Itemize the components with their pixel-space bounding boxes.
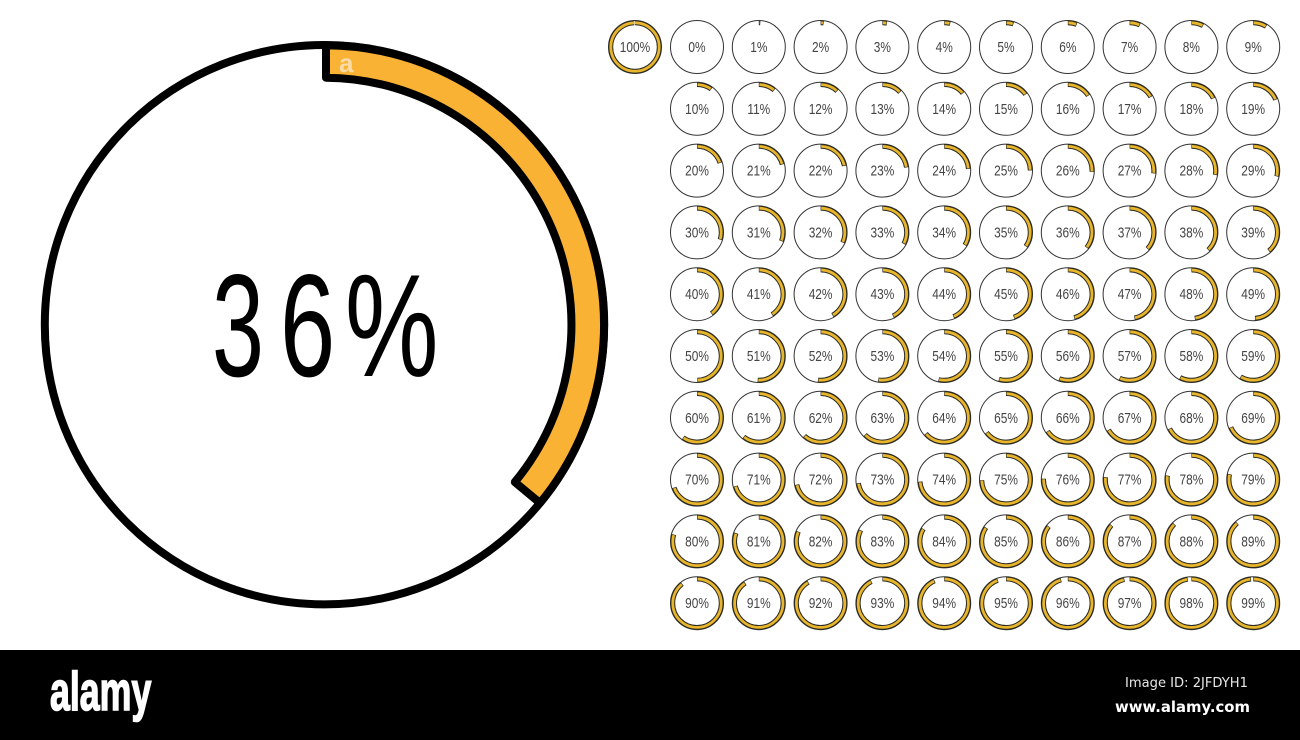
gauge 31%: 31% xyxy=(747,224,771,241)
gauge 4% xyxy=(918,20,971,74)
gauge 62% xyxy=(794,391,847,444)
gauge 61%: 61% xyxy=(747,410,771,426)
gauge 34%: 34% xyxy=(932,224,956,241)
gauge 96%: 96% xyxy=(1056,595,1080,611)
gauge 6%: 6% xyxy=(1059,39,1077,55)
gauge 52% xyxy=(794,330,847,382)
gauge 97% xyxy=(1103,577,1156,630)
gauge 71%: 71% xyxy=(747,471,771,488)
gauge 16% xyxy=(1041,82,1094,135)
gauge 25%: 25% xyxy=(994,162,1018,179)
gauge 56%: 56% xyxy=(1056,348,1080,364)
gauge 77%: 77% xyxy=(1118,471,1142,488)
gauge 74%: 74% xyxy=(932,471,956,488)
gauge 91%: 91% xyxy=(747,595,771,611)
gauge 37% xyxy=(1103,206,1156,259)
gauge 73%: 73% xyxy=(871,471,894,488)
gauge 35% xyxy=(980,206,1032,259)
gauge 97%: 97% xyxy=(1118,595,1142,611)
gauge 92% xyxy=(794,577,847,630)
gauge 8%: 8% xyxy=(1183,39,1200,55)
gauge 55% xyxy=(980,330,1032,382)
gauge 19% xyxy=(1227,82,1280,135)
gauge 93%: 93% xyxy=(871,595,894,611)
gauge 83%: 83% xyxy=(871,533,894,550)
gauge 38%: 38% xyxy=(1180,224,1203,241)
gauge 83% xyxy=(856,515,909,568)
gauge 90% xyxy=(670,577,724,630)
gauge 26%: 26% xyxy=(1056,162,1080,179)
footer background xyxy=(0,650,1300,740)
gauge 10%: 10% xyxy=(685,101,709,117)
gauge 43% xyxy=(856,268,909,321)
gauge 23% xyxy=(856,144,909,197)
gauge 84% xyxy=(918,515,971,568)
gauge 67% xyxy=(1103,391,1156,444)
gauge 42% xyxy=(794,268,847,321)
gauge 89% xyxy=(1227,515,1280,568)
gauge 17% xyxy=(1103,82,1156,135)
gauge 58%: 58% xyxy=(1180,348,1203,364)
gauge 84%: 84% xyxy=(932,533,956,550)
gauge 79%: 79% xyxy=(1241,471,1265,488)
gauge 5%: 5% xyxy=(997,39,1015,55)
gauge 90%: 90% xyxy=(685,595,709,611)
gauge 55%: 55% xyxy=(994,348,1018,364)
gauge 87%: 87% xyxy=(1118,533,1142,550)
gauge 43%: 43% xyxy=(871,286,894,302)
gauge 54%: 54% xyxy=(932,348,956,364)
gauge 15%: 15% xyxy=(994,101,1018,117)
gauge 41%: 41% xyxy=(747,286,771,302)
gauge 53% xyxy=(856,330,909,382)
gauge 56% xyxy=(1041,330,1094,382)
gauge 21% xyxy=(732,144,785,197)
gauge 86%: 86% xyxy=(1056,533,1080,550)
gauge 24% xyxy=(918,144,971,197)
gauge 79% xyxy=(1227,453,1280,506)
gauge 63%: 63% xyxy=(871,410,894,426)
gauge 98% xyxy=(1165,577,1218,630)
gauge 23%: 23% xyxy=(871,162,894,179)
gauge 70% xyxy=(670,453,724,506)
gauge 10% xyxy=(670,82,724,135)
gauge 19%: 19% xyxy=(1241,101,1265,117)
gauge 66% xyxy=(1041,391,1094,444)
gauge 7%: 7% xyxy=(1121,39,1138,55)
gauge 9% xyxy=(1227,20,1280,74)
gauge 36% xyxy=(1041,206,1094,259)
gauge 95% xyxy=(980,577,1032,630)
gauge 36%: 36% xyxy=(1056,224,1080,241)
gauge 4%: 4% xyxy=(936,39,953,55)
gauge 95%: 95% xyxy=(994,595,1018,611)
gauge 68% xyxy=(1165,391,1218,444)
gauge 85%: 85% xyxy=(994,533,1018,550)
gauge 92%: 92% xyxy=(809,595,833,611)
gauge 62%: 62% xyxy=(809,410,833,426)
gauge 49%: 49% xyxy=(1241,286,1265,302)
large gauge outer ring xyxy=(45,45,604,604)
gauge 33%: 33% xyxy=(871,224,894,241)
gauge 46%: 46% xyxy=(1056,286,1080,302)
gauge 86% xyxy=(1041,515,1094,568)
gauge 99%: 99% xyxy=(1241,595,1265,611)
gauge 59% xyxy=(1227,330,1280,382)
gauge 52%: 52% xyxy=(809,348,833,364)
gauge 77% xyxy=(1103,453,1156,506)
gauge 64% xyxy=(918,391,971,444)
gauge 76% xyxy=(1041,453,1094,506)
gauge 13% xyxy=(856,82,909,135)
gauge 87% xyxy=(1103,515,1156,568)
gauge 26% xyxy=(1041,144,1094,197)
gauge 91% xyxy=(732,577,785,630)
gauge 75%: 75% xyxy=(994,471,1018,488)
gauge 82%: 82% xyxy=(809,533,833,550)
gauge 11%: 11% xyxy=(747,101,770,117)
gauge 42%: 42% xyxy=(809,286,833,302)
gauge 32%: 32% xyxy=(809,224,833,241)
gauge 50%: 50% xyxy=(685,348,709,364)
gauge 49% xyxy=(1227,268,1280,321)
gauge 9%: 9% xyxy=(1245,39,1262,55)
gauge 6% xyxy=(1041,20,1094,74)
gauge 20%: 20% xyxy=(685,162,709,179)
gauge 39%: 39% xyxy=(1241,224,1265,241)
gauge 44% xyxy=(918,268,971,321)
gauge 54% xyxy=(918,330,971,382)
gauge 14%: 14% xyxy=(932,101,956,117)
gauge 60% xyxy=(670,391,724,444)
gauge 96% xyxy=(1041,577,1094,630)
gauge 75% xyxy=(980,453,1032,506)
gauge 32% xyxy=(794,206,847,259)
gauge 28% xyxy=(1165,144,1218,197)
gauge 99% xyxy=(1227,577,1280,630)
gauge 45%: 45% xyxy=(994,286,1018,302)
gauge 69%: 69% xyxy=(1241,410,1265,426)
gauge 0% xyxy=(670,20,724,74)
gauge 57% xyxy=(1103,330,1156,382)
gauge 78%: 78% xyxy=(1180,471,1203,488)
gauge 66%: 66% xyxy=(1056,410,1080,426)
gauge 100% xyxy=(608,20,662,74)
gauge 14% xyxy=(918,82,971,135)
gauge 80%: 80% xyxy=(685,533,709,550)
gauge 16%: 16% xyxy=(1056,101,1080,117)
footer band xyxy=(0,650,1300,740)
gauge 88% xyxy=(1165,515,1218,568)
watermark letter on arc: a xyxy=(339,48,354,78)
gauge 68%: 68% xyxy=(1180,410,1203,426)
gauge 94% xyxy=(918,577,971,630)
large gauge orange arc xyxy=(326,45,604,503)
gauge 24%: 24% xyxy=(932,162,956,179)
large percentage label: 6 xyxy=(280,245,335,408)
website url: www.alamy.com xyxy=(1115,698,1250,716)
gauge 12%: 12% xyxy=(809,101,833,117)
gauge 72%: 72% xyxy=(809,471,833,488)
gauge 22% xyxy=(794,144,847,197)
gauge 3% xyxy=(856,20,909,74)
gauge 85% xyxy=(980,515,1032,568)
gauge 64%: 64% xyxy=(932,410,956,426)
gauge 41% xyxy=(732,268,785,321)
gauge 94%: 94% xyxy=(932,595,956,611)
gauge 74% xyxy=(918,453,971,506)
gauge 100%: 100% xyxy=(620,39,650,55)
gauge 17%: 17% xyxy=(1118,101,1142,117)
gauge 1% xyxy=(732,20,785,74)
gauge 67%: 67% xyxy=(1118,410,1142,426)
gauge 53%: 53% xyxy=(871,348,894,364)
gauge 20% xyxy=(670,144,724,197)
gauge 48% xyxy=(1165,268,1218,321)
large gauge: 36% xyxy=(45,45,604,604)
gauge 59%: 59% xyxy=(1241,348,1265,364)
gauge 1%: 1% xyxy=(750,39,768,55)
gauge 21%: 21% xyxy=(747,162,771,179)
gauge 71% xyxy=(732,453,785,506)
gauge 30% xyxy=(670,206,724,259)
gauge 88%: 88% xyxy=(1180,533,1203,550)
gauge 58% xyxy=(1165,330,1218,382)
gauge 61% xyxy=(732,391,785,444)
gauge 60%: 60% xyxy=(685,410,709,426)
gauge 7% xyxy=(1103,20,1156,74)
gauge 28%: 28% xyxy=(1180,162,1203,179)
gauge 45% xyxy=(980,268,1032,321)
gauge 50% xyxy=(670,330,724,382)
gauge 25% xyxy=(980,144,1032,197)
gauge 18% xyxy=(1165,82,1218,135)
gauge 27% xyxy=(1103,144,1156,197)
gauge 81% xyxy=(732,515,785,568)
gauge 5% xyxy=(980,20,1032,74)
image id: Image ID: 2JFDYH1 xyxy=(1125,675,1248,691)
gauge 40%: 40% xyxy=(685,286,709,302)
gauge 31% xyxy=(732,206,785,259)
alamy logo: alamy xyxy=(50,660,152,722)
gauge 29%: 29% xyxy=(1241,162,1265,179)
gauge 76%: 76% xyxy=(1056,471,1080,488)
gauge 78% xyxy=(1165,453,1218,506)
gauge 27%: 27% xyxy=(1118,162,1142,179)
gauge 12% xyxy=(794,82,847,135)
gauge 81%: 81% xyxy=(747,533,771,550)
gauge 72% xyxy=(794,453,847,506)
large percentage label: % xyxy=(345,244,438,407)
gauge 65% xyxy=(980,391,1032,444)
gauge 34% xyxy=(918,206,971,259)
gauge 70%: 70% xyxy=(685,471,709,488)
gauge grid xyxy=(608,20,1280,630)
gauge 0%: 0% xyxy=(688,39,706,55)
gauge 37%: 37% xyxy=(1118,224,1142,241)
gauge 63% xyxy=(856,391,909,444)
gauge 8% xyxy=(1165,20,1218,74)
gauge 48%: 48% xyxy=(1180,286,1203,302)
gauge 2%: 2% xyxy=(812,39,829,55)
gauge 98%: 98% xyxy=(1180,595,1203,611)
gauge 39% xyxy=(1227,206,1280,259)
gauge 47% xyxy=(1103,268,1156,321)
gauge 47%: 47% xyxy=(1118,286,1142,302)
gauge 73% xyxy=(856,453,909,506)
gauge 38% xyxy=(1165,206,1218,259)
gauge 46% xyxy=(1041,268,1094,321)
gauge 40% xyxy=(670,268,724,321)
gauge 51%: 51% xyxy=(747,348,771,364)
gauge 3%: 3% xyxy=(874,39,891,55)
gauge 33% xyxy=(856,206,909,259)
gauge 89%: 89% xyxy=(1241,533,1265,550)
gauge 13%: 13% xyxy=(871,101,894,117)
gauge 11% xyxy=(732,82,785,135)
gauge 2% xyxy=(794,20,847,74)
gauge 35%: 35% xyxy=(994,224,1018,241)
gauge 82% xyxy=(794,515,847,568)
gauge 15% xyxy=(980,82,1032,135)
gauge 30%: 30% xyxy=(685,224,709,241)
gauge 57%: 57% xyxy=(1118,348,1142,364)
gauge 22%: 22% xyxy=(809,162,833,179)
large percentage label xyxy=(212,244,438,408)
gauge 65%: 65% xyxy=(994,410,1018,426)
gauge 93% xyxy=(856,577,909,630)
gauge 51% xyxy=(732,330,785,382)
gauge 18%: 18% xyxy=(1180,101,1203,117)
gauge 29% xyxy=(1227,144,1280,197)
gauge 44%: 44% xyxy=(932,286,956,302)
gauge 69% xyxy=(1227,391,1280,444)
large percentage label: 3 xyxy=(212,244,264,407)
gauge 80% xyxy=(670,515,724,568)
